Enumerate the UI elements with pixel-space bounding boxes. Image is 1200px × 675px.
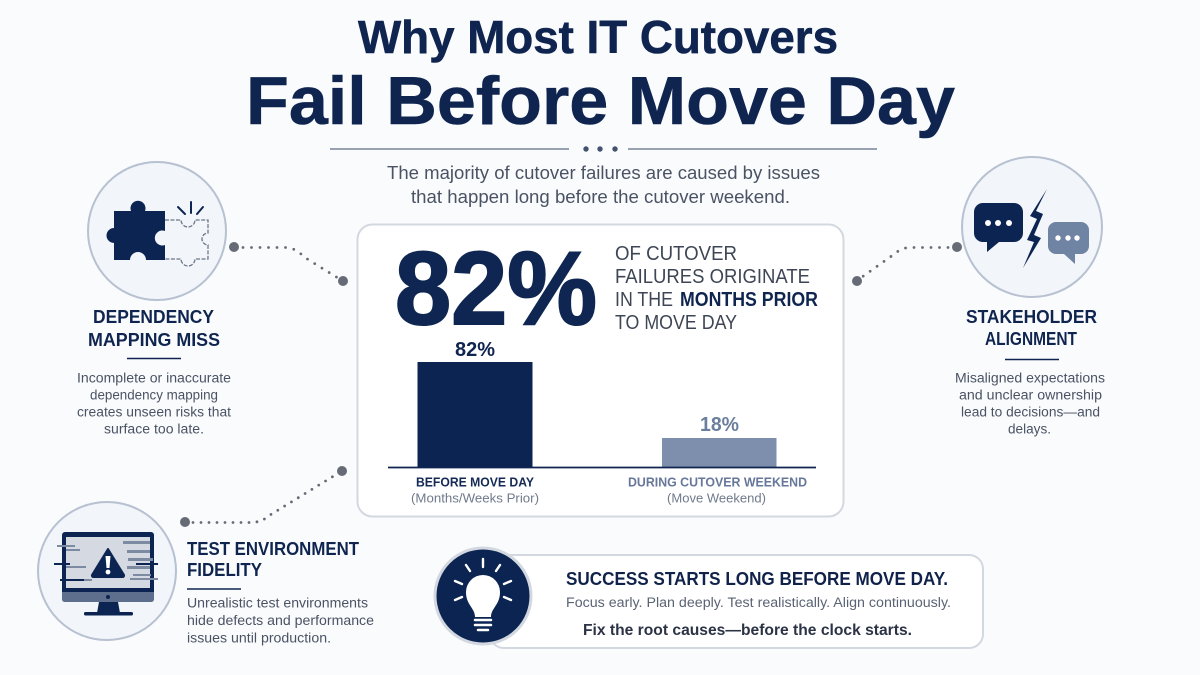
icon: puzzle piece [88, 162, 226, 300]
body text: delays. [1008, 422, 1051, 436]
panel: stakeholder alignment [955, 307, 1105, 436]
statistic description: FAILURES ORIGINATE [615, 265, 810, 288]
bar chart: BEFORE MOVE DAY [416, 476, 535, 490]
statistic description: TO MOVE DAY [615, 311, 737, 334]
heading: ALIGNMENT [985, 329, 1077, 349]
heading: FIDELITY [187, 560, 262, 580]
panel: central statistic [358, 224, 844, 516]
heading: DEPENDENCY [93, 307, 214, 327]
icon: conflicting speech bubbles [962, 157, 1102, 297]
heading [966, 307, 1097, 349]
body text [77, 370, 231, 436]
icon: monitor with warning [38, 502, 176, 640]
statistic description: OF CUTOVER [615, 242, 737, 265]
bar chart: 18% [700, 414, 739, 436]
callout heading: SUCCESS STARTS LONG BEFORE MOVE DAY. [566, 568, 948, 589]
body text [955, 370, 1105, 436]
body text: and unclear ownership [959, 388, 1102, 402]
bar chart: (Move Weekend) [667, 490, 766, 506]
icon: light bulb [435, 548, 531, 644]
arrow: stakeholder connector [852, 242, 962, 286]
body text: issues until production. [187, 630, 331, 646]
heading: MAPPING MISS [88, 330, 220, 350]
body text [187, 596, 374, 646]
body text: creates unseen risks that [77, 404, 231, 420]
bar chart: (Months/Weeks Prior) [411, 490, 539, 506]
bar chart: DURING CUTOVER WEEKEND [628, 476, 807, 490]
subtitle: that happen long before the cutover weekend. [411, 186, 790, 207]
title: Fail Before Move Day [246, 63, 955, 139]
title: Why Most IT Cutovers [358, 11, 838, 63]
body text: Incomplete or inaccurate [77, 370, 231, 386]
bar chart: 82% [455, 339, 495, 361]
callout closing line: Fix the root causes—before the clock starts. [583, 622, 912, 639]
arrow: test environment connector [180, 466, 347, 527]
subtitle [387, 162, 820, 207]
big number 82%: 82% [395, 231, 597, 347]
heading: TEST ENVIRONMENT [187, 539, 359, 559]
body text: lead to decisions—and [961, 404, 1100, 420]
callout text: Focus early. Plan deeply. Test realistically. Align continuously. [566, 595, 951, 610]
statistic description: IN THE [615, 288, 673, 311]
title [246, 11, 955, 139]
arrow: dependency connector [229, 242, 348, 286]
panel: dependency mapping miss [77, 307, 231, 436]
heading: STAKEHOLDER [966, 307, 1097, 327]
statistic description: MONTHS PRIOR [680, 288, 818, 311]
callout: success starts long before move day [435, 548, 983, 648]
statistic description [615, 242, 818, 334]
body text: Unrealistic test environments [187, 596, 368, 610]
body text: hide defects and performance [187, 613, 374, 628]
body text: Misaligned expectations [955, 370, 1105, 386]
heading [187, 539, 359, 580]
panel: test environment fidelity [187, 539, 374, 646]
body text: surface too late. [104, 422, 204, 436]
body text: dependency mapping [90, 388, 218, 402]
heading [88, 307, 220, 350]
bar chart [388, 339, 816, 506]
subtitle: The majority of cutover failures are caused by issues [387, 162, 820, 183]
